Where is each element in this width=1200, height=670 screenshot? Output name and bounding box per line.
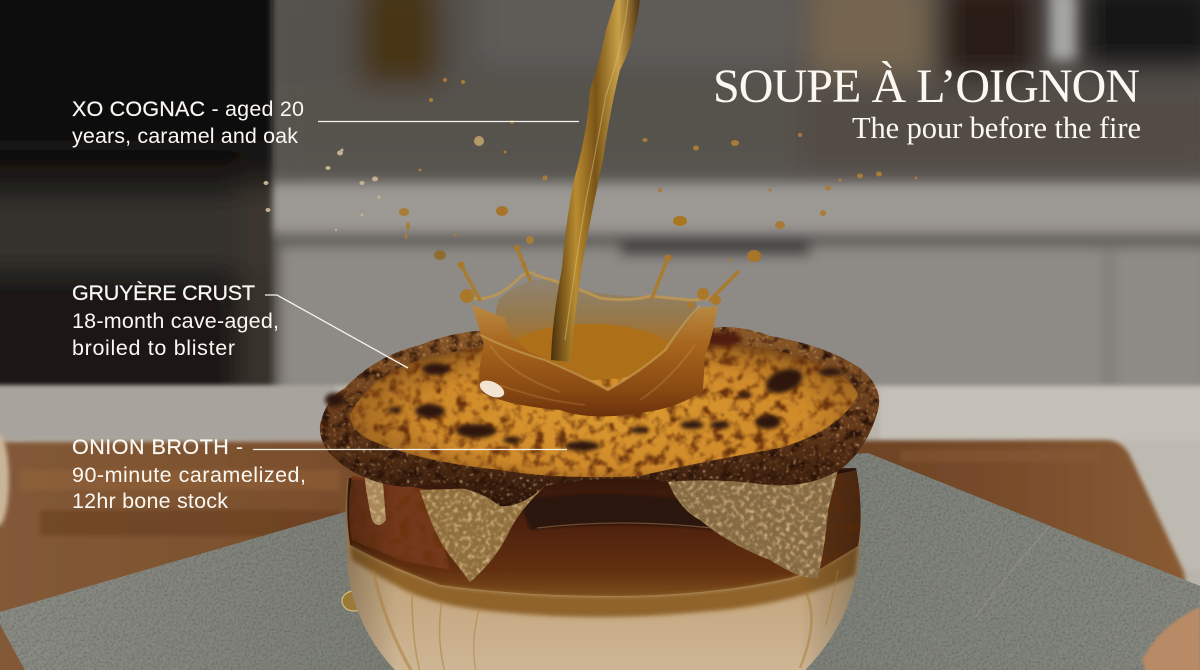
lower glaze transition <box>350 545 858 617</box>
flying droplets <box>264 78 918 262</box>
right cheese drape <box>668 470 838 578</box>
glaze highlights <box>537 523 712 528</box>
title: SOUPE À L’OIGNON <box>713 60 1140 113</box>
crust top <box>350 339 858 477</box>
dark neck band <box>520 494 715 530</box>
crown beads <box>458 245 721 308</box>
callout: onion broth <box>72 435 567 513</box>
brown glaze band <box>347 468 861 596</box>
subtitle: The pour before the fire <box>852 111 1141 145</box>
cognac splash crown <box>458 245 738 416</box>
marble counter <box>0 385 1200 670</box>
cognac pour stream <box>551 0 640 362</box>
drips on crock <box>373 570 838 670</box>
inner pool <box>508 324 672 380</box>
wooden board <box>0 440 1200 670</box>
callout: onion broth: 90-minute caramelized, <box>72 463 306 487</box>
callout: onion broth: ONION BROTH - <box>72 435 243 459</box>
crown spikes <box>461 248 738 300</box>
callout: xo cognac: years, caramel and oak <box>72 124 298 148</box>
title block <box>713 60 1141 145</box>
crown body <box>472 305 718 416</box>
red glaze on right <box>810 470 861 572</box>
crown highlight <box>477 377 507 401</box>
crown glints <box>490 345 695 405</box>
blurred kitchen background <box>0 0 1200 388</box>
object at left edge <box>0 434 9 526</box>
red glaze on left <box>349 476 450 570</box>
callout: gruyere crust: broiled to blister <box>72 336 235 360</box>
crust rim <box>320 327 879 506</box>
callout: gruyere crust: GRUYÈRE CRUST <box>72 280 255 305</box>
left cheese strand <box>364 470 386 525</box>
crown front lip <box>480 306 700 390</box>
soup crock <box>346 468 861 670</box>
shading on crock <box>346 470 861 670</box>
callout: xo cognac <box>72 97 579 148</box>
cognac puddle <box>342 591 366 611</box>
blister spots <box>325 332 842 451</box>
gruyere crust <box>320 327 879 506</box>
onion at bottom right <box>1142 607 1200 670</box>
slate slab <box>0 453 1200 670</box>
crown back wall <box>490 279 702 345</box>
callout: xo cognac: XO COGNAC - aged 20 <box>72 97 304 121</box>
crown rim <box>466 273 716 300</box>
callout: gruyere crust: 18-month cave-aged, <box>72 309 279 333</box>
left cheese drape <box>420 486 545 582</box>
callout: gruyere crust <box>72 280 408 368</box>
callout: onion broth: 12hr bone stock <box>72 489 228 513</box>
crock body <box>346 470 861 670</box>
